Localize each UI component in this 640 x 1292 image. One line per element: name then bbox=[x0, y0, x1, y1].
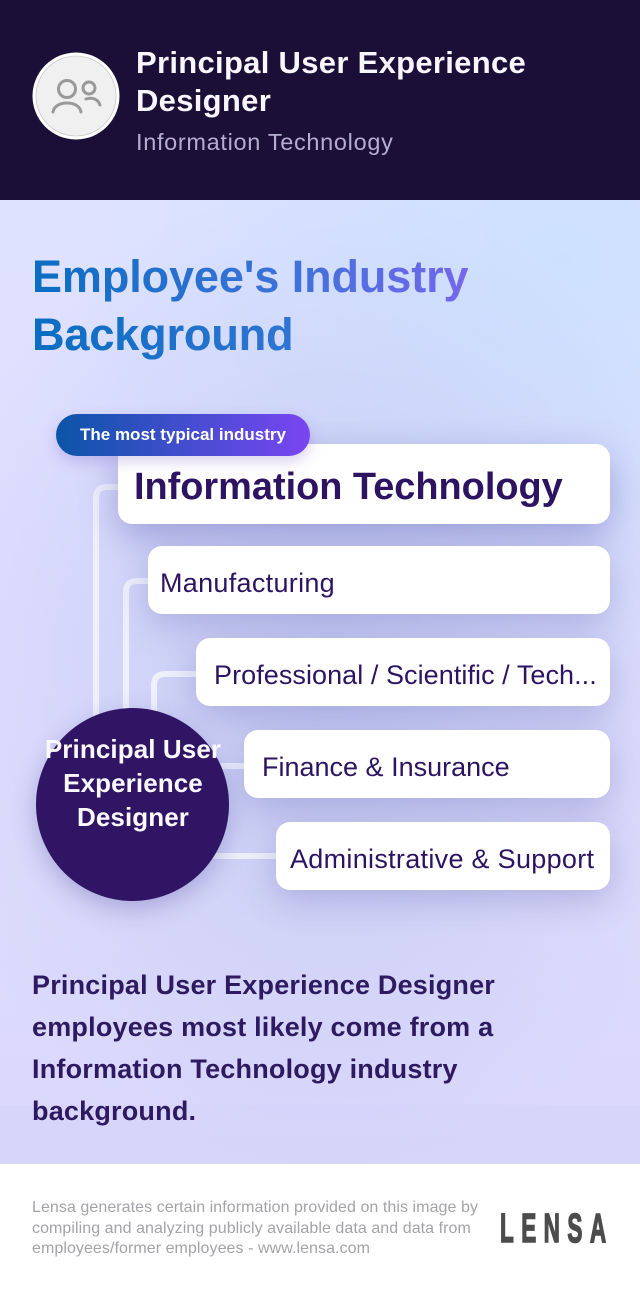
card: Manufacturing: Manufacturing bbox=[160, 568, 335, 598]
summary text bbox=[32, 970, 495, 1126]
disclaimer: compiling and analyzing publicly available data and data from bbox=[32, 1220, 471, 1236]
summary text: Principal User Experience Designer bbox=[32, 970, 495, 1000]
footer bbox=[0, 1164, 640, 1292]
badge: most typical industry: The most typical industry bbox=[80, 425, 286, 444]
central circle label: Designer bbox=[77, 802, 189, 832]
card: Information Technology: Information Technology bbox=[134, 466, 563, 508]
summary text: Information Technology industry bbox=[32, 1054, 458, 1084]
main gradient panel bbox=[0, 200, 640, 1164]
central circle bbox=[36, 708, 229, 901]
decorative diagonal shapes bbox=[0, 200, 640, 1164]
badge: most typical industry bbox=[56, 414, 310, 456]
header title: Designer bbox=[136, 83, 271, 118]
card: Finance: Finance & Insurance bbox=[262, 752, 510, 782]
card: Finance bbox=[244, 730, 610, 798]
summary text: background. bbox=[32, 1096, 196, 1126]
disclaimer: employees/former employees - www.lensa.com bbox=[32, 1240, 370, 1257]
central circle label: Principal User bbox=[45, 734, 221, 764]
disclaimer: Lensa generates certain information provided on this image by bbox=[32, 1199, 478, 1216]
logo: LENSA: LENSA bbox=[500, 1205, 614, 1251]
card: Manufacturing bbox=[148, 546, 610, 614]
card: Professional bbox=[196, 638, 610, 706]
header subtitle: Information Technology bbox=[136, 129, 394, 155]
header title bbox=[136, 45, 526, 118]
header title: Principal User Experience bbox=[136, 45, 526, 80]
central circle label bbox=[45, 734, 221, 832]
header band bbox=[0, 0, 640, 200]
summary text: employees most likely come from a bbox=[32, 1012, 493, 1042]
card: Administrative bbox=[276, 822, 610, 890]
card: Professional: Professional / Scientific / Tech... bbox=[214, 660, 597, 690]
central circle label: Experience bbox=[63, 768, 203, 798]
card: Administrative: Administrative & Support bbox=[290, 844, 594, 874]
section title: Background bbox=[32, 309, 294, 360]
icon: avatar with two people bbox=[32, 52, 120, 140]
card: Information Technology bbox=[118, 444, 610, 524]
section title: Employee's Industry bbox=[32, 251, 468, 302]
section title bbox=[32, 248, 532, 364]
disclaimer bbox=[32, 1199, 478, 1257]
